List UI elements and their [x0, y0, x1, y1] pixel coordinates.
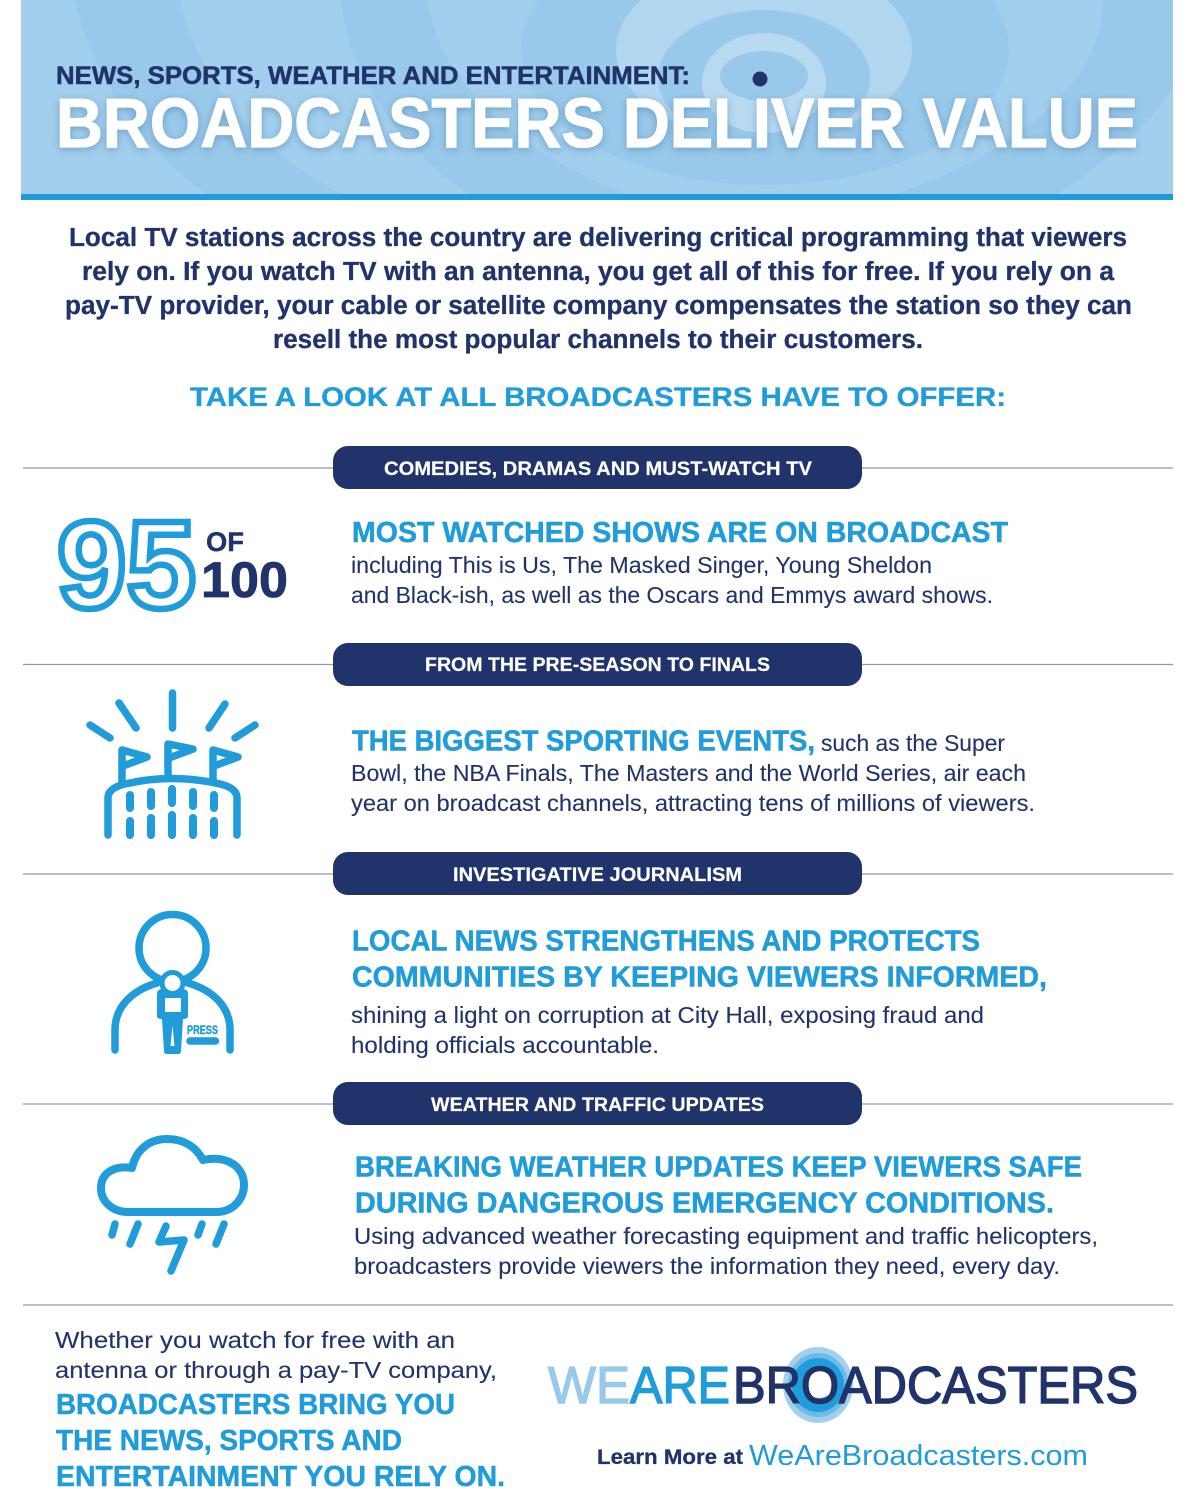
intro paragraph [65, 224, 1132, 354]
text: sporting events: such as the Super [821, 730, 1005, 756]
subheading: TAKE A LOOK AT ALL BROADCASTERS HAVE TO OFFER: [190, 382, 1006, 412]
stat: 95 of 100 [57, 497, 288, 635]
logo: We Are Broadcasters: WE [548, 1357, 630, 1415]
closing statement: ENTERTAINMENT YOU RELY ON. [56, 1461, 505, 1493]
logo: We Are Broadcasters: ARE [630, 1357, 730, 1415]
icon: reporter with microphone [115, 914, 230, 1054]
text: sporting events [351, 726, 1035, 816]
icon: stadium with flags [90, 693, 255, 835]
section banner: sports: FROM THE PRE-SEASON TO FINALS [425, 654, 770, 676]
call to action: Learn More at [597, 1445, 743, 1469]
section banner: weather: WEATHER AND TRAFFIC UPDATES [431, 1094, 764, 1116]
text: local news: LOCAL NEWS STRENGTHENS AND PROTECTS [352, 926, 980, 958]
intro paragraph: rely on. If you watch TV with an antenna, you get all of this for free. If you rely on a [82, 258, 1115, 286]
text: weather updates: broadcasters provide viewers the information they need, every day. [354, 1253, 1060, 1279]
section banner: journalism: INVESTIGATIVE JOURNALISM [453, 864, 742, 886]
call to action: WeAreBroadcasters.com [749, 1440, 1088, 1472]
closing statement: BROADCASTERS BRING YOU [56, 1389, 455, 1421]
text: most watched shows [351, 517, 1008, 608]
stat: 95 of 100: OF [206, 527, 244, 557]
icon: storm cloud [101, 1139, 244, 1271]
icon: reporter with microphone: PRESS [187, 1023, 218, 1037]
text: local news: holding officials accountable. [351, 1032, 659, 1058]
call to action [597, 1440, 1088, 1472]
text: most watched shows: MOST WATCHED SHOWS ARE ON BROADCAST [352, 517, 1008, 549]
text: sporting events: Bowl, the NBA Finals, The Masters and the World Series, air each [351, 760, 1026, 786]
text: most watched shows: including This is Us, The Masked Singer, Young Sheldon [351, 552, 932, 578]
closing statement [55, 1327, 505, 1493]
text: sporting events: THE BIGGEST SPORTING EVENTS, [352, 726, 815, 758]
kicker heading: NEWS, SPORTS, WEATHER AND ENTERTAINMENT: [56, 62, 690, 90]
text: weather updates: BREAKING WEATHER UPDATES KEEP VIEWERS SAFE [355, 1152, 1082, 1184]
section banner: weather [333, 1082, 862, 1125]
text: local news [351, 926, 1047, 1058]
section banner: sports [333, 643, 862, 686]
text: most watched shows: and Black-ish, as well as the Oscars and Emmys award shows. [351, 582, 993, 608]
header banner [21, 0, 1180, 200]
text: local news: shining a light on corruption at City Hall, exposing fraud and [351, 1002, 984, 1028]
intro paragraph: pay-TV provider, your cable or satellite company compensates the station so they can [65, 292, 1132, 320]
text: weather updates [354, 1152, 1098, 1279]
intro paragraph: Local TV stations across the country are delivering critical programming that viewers [69, 224, 1127, 252]
closing statement: THE NEWS, SPORTS AND [56, 1425, 402, 1457]
logo: We Are Broadcasters: BROADCASTERS [733, 1357, 1138, 1415]
text: local news: COMMUNITIES BY KEEPING VIEWERS INFORMED, [352, 962, 1047, 994]
closing statement: antenna or through a pay-TV company, [55, 1357, 497, 1383]
text: weather updates: Using advanced weather forecasting equipment and traffic helicopters, [354, 1223, 1098, 1249]
stat: 95 of 100: 100 [201, 552, 288, 608]
stat: 95 of 100: 95 [57, 497, 196, 635]
text: weather updates: DURING DANGEROUS EMERGENCY CONDITIONS. [355, 1188, 1054, 1220]
intro paragraph: resell the most popular channels to their customers. [273, 326, 923, 354]
text: sporting events: year on broadcast channels, attracting tens of millions of viewers. [351, 790, 1035, 816]
closing statement: Whether you watch for free with an [55, 1327, 455, 1353]
logo: We Are Broadcasters [548, 1347, 1138, 1423]
section banner: comedies: COMEDIES, DRAMAS AND MUST-WATCH TV [384, 458, 812, 480]
main title: BROADCASTERS DELIVER VALUE [56, 84, 1138, 162]
section banner: journalism [333, 852, 862, 895]
section banner: comedies [333, 446, 862, 489]
